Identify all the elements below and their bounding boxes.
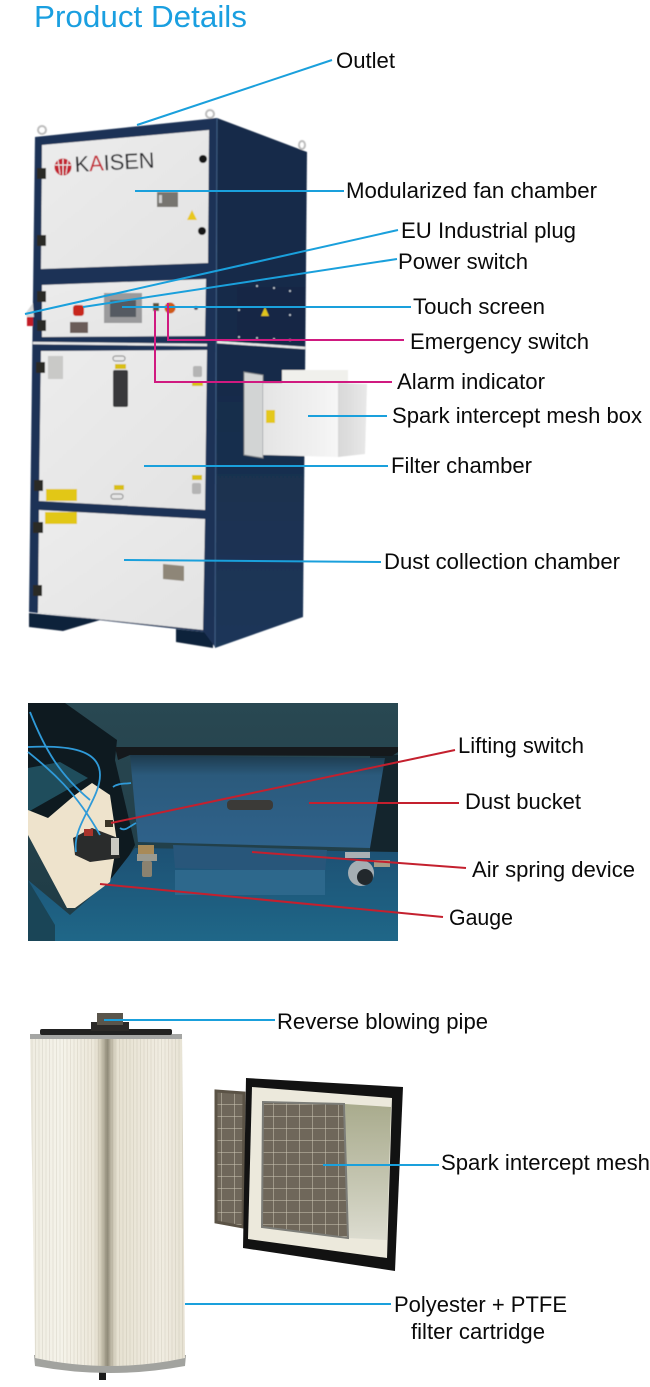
- dust collector cabinet photo: [25, 110, 367, 648]
- top ring: [30, 1034, 182, 1039]
- rear mesh: [216, 1091, 244, 1227]
- bucket body: [130, 755, 385, 848]
- label: plug: EU Industrial plug: [401, 218, 576, 243]
- line: power switch: [83, 259, 397, 307]
- bucket lip: [115, 747, 398, 760]
- line: spark mesh: [323, 1164, 439, 1166]
- line: polyester cartridge: [185, 1303, 391, 1305]
- dark recess left: [28, 703, 135, 890]
- cabinet front frame: [29, 118, 217, 647]
- control panel door: [42, 279, 206, 337]
- control panel devices: [70, 293, 198, 333]
- floor: [28, 848, 398, 941]
- cartridge bottom pin: [99, 1372, 106, 1380]
- line: EU plug: [25, 230, 398, 314]
- front caster: [137, 845, 157, 877]
- cabinet labels: [336, 48, 643, 574]
- line: air spring: [252, 852, 466, 868]
- label: emergency: Emergency switch: [410, 329, 589, 354]
- rear caster: [345, 852, 390, 886]
- frame highlight: [215, 118, 217, 647]
- block reflection: [175, 870, 325, 895]
- callout leader lines, cabinet: [25, 60, 411, 562]
- label: outlet: Outlet: [336, 48, 396, 73]
- dark right recess: [370, 755, 398, 855]
- lifting eyes: [38, 110, 305, 149]
- air spring device: [173, 845, 327, 873]
- KAISEN logo: KAISEN: [74, 148, 155, 177]
- leader lines: [100, 750, 466, 917]
- line: gauge: [100, 884, 443, 917]
- line: fan chamber: [135, 190, 344, 192]
- white divider stripe: [33, 342, 305, 348]
- modularized fan chamber door: [41, 130, 209, 269]
- label: alarm: Alarm indicator: [397, 369, 545, 394]
- label: dust bucket: Dust bucket: [465, 789, 582, 814]
- label: filter: Filter chamber: [391, 453, 532, 478]
- dust collection door: [38, 510, 205, 630]
- line: spark box: [308, 415, 387, 417]
- label: touch: Touch screen: [413, 294, 545, 319]
- black top cap: [40, 1029, 172, 1035]
- label: spark box: Spark intercept mesh box: [392, 403, 643, 428]
- line: dust chamber: [124, 560, 381, 562]
- teal left panel: [28, 762, 88, 812]
- pleat lines: [30, 1035, 185, 1366]
- side vent panel: [237, 285, 305, 341]
- label: lifting switch: Lifting switch: [458, 733, 584, 758]
- line: lifting switch: [111, 750, 455, 823]
- cartridge labels: [277, 1009, 650, 1344]
- label: reverse blowing pipe: Reverse blowing pipe: [277, 1009, 488, 1034]
- title: Product Details: [34, 0, 247, 34]
- fan door fittings: [157, 155, 207, 235]
- label: dust chamber: Dust collection chamber: [384, 549, 620, 574]
- background wall: [28, 703, 398, 941]
- cylinder mount: [28, 783, 117, 908]
- air tubes: [28, 712, 136, 852]
- spark intercept mesh box: [244, 370, 367, 458]
- industrial plug: [25, 303, 34, 326]
- line: emergency switch: [168, 303, 404, 340]
- label: filter cartridge: filter cartridge: [411, 1319, 545, 1344]
- pipe fitting: [91, 1013, 129, 1031]
- label: power: Power switch: [398, 249, 528, 274]
- dust bucket photo: [28, 703, 466, 941]
- pleated body: [30, 1035, 185, 1366]
- label: polyester PTFE: Polyester + PTFE: [394, 1292, 567, 1317]
- line: touch screen: [122, 306, 411, 308]
- dust bucket labels: [449, 733, 635, 930]
- label: gauge: Gauge: [449, 905, 513, 930]
- line: alarm indicator: [155, 310, 392, 382]
- line: outlet: [137, 60, 332, 125]
- pressure regulator: [73, 820, 120, 862]
- line: filter chamber: [144, 465, 388, 467]
- bottom ring: [34, 1355, 186, 1373]
- cabinet feet: [29, 613, 213, 648]
- cartridge and mesh leader lines: [104, 1020, 439, 1304]
- line: dust bucket: [309, 802, 459, 804]
- filter cartridge photo: [30, 1013, 186, 1380]
- spark intercept mesh photo: [216, 1078, 403, 1271]
- dust door fittings: [45, 512, 184, 581]
- hinges: [33, 168, 46, 596]
- left lower strip: [28, 880, 55, 941]
- inner white frame: [248, 1087, 392, 1258]
- front mesh: [262, 1102, 348, 1238]
- filter door fittings: [46, 356, 203, 501]
- filter chamber door: [39, 350, 207, 510]
- line: reverse blowing pipe: [104, 1019, 275, 1021]
- black gasket frame: [243, 1078, 403, 1271]
- olive interior: [345, 1104, 391, 1240]
- cabinet side: [215, 118, 307, 648]
- label: fan chamber: Modularized fan chamber: [346, 178, 597, 203]
- bucket handle: [227, 800, 273, 810]
- label: spark intercept mesh: Spark intercept mesh: [441, 1150, 650, 1175]
- label: air spring: Air spring device: [472, 857, 635, 882]
